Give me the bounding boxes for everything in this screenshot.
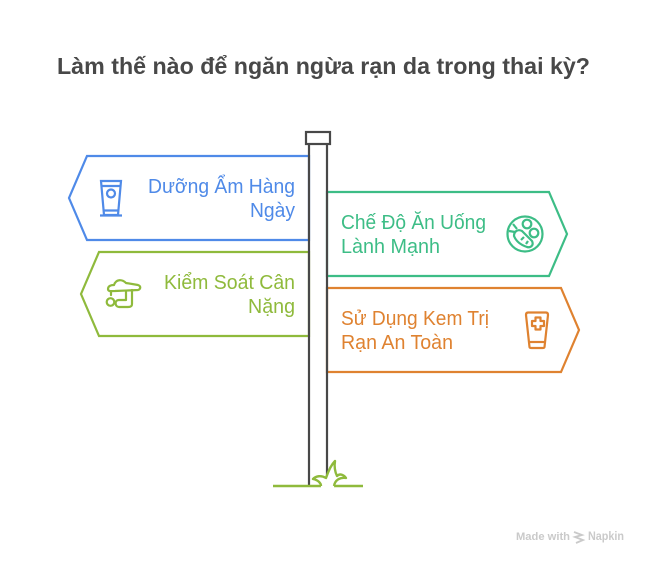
- panel: orange sign: [327, 288, 579, 372]
- text: Kiểm Soát Cân Nặng: Nặng: [248, 296, 295, 318]
- text: Sử Dụng Kem Trị Rạn An Toàn: Sử Dụng Kem Trị: [341, 308, 489, 330]
- text: Kiểm Soát Cân Nặng: Kiểm Soát Cân: [164, 272, 295, 294]
- footer: Made with Napkin: Made with: [516, 531, 570, 543]
- panel: lime sign: [81, 252, 309, 336]
- text: Chế Độ Ăn Uống Lành Mạnh: Lành Mạnh: [341, 236, 440, 258]
- icon: treatment cream tube: [526, 312, 548, 348]
- icon: body scale: [107, 280, 140, 307]
- signpost pole: [306, 132, 330, 486]
- footer: Made with Napkin: [516, 531, 624, 543]
- panel: green sign: [327, 192, 567, 276]
- pole cap: [306, 132, 330, 144]
- footer: Made with Napkin: Napkin: [588, 531, 624, 543]
- icon: cream tube: [100, 181, 122, 216]
- title: Làm thế nào để ngăn ngừa rạn da trong thai kỳ?: [57, 53, 590, 79]
- text: Sử Dụng Kem Trị Rạn An Toàn: Rạn An Toàn: [341, 332, 453, 354]
- text: Chế Độ Ăn Uống Lành Mạnh: Chế Độ Ăn Uống: [341, 211, 486, 234]
- icon: carrot and vegetables: [508, 216, 542, 252]
- text: Dưỡng Ẩm Hàng Ngày: Dưỡng Ẩm Hàng: [148, 175, 295, 198]
- icon: Napkin logo: [574, 532, 583, 543]
- ground and grass: [273, 461, 363, 487]
- panel: blue sign: [69, 156, 309, 240]
- text: Dưỡng Ẩm Hàng Ngày: Ngày: [250, 200, 295, 222]
